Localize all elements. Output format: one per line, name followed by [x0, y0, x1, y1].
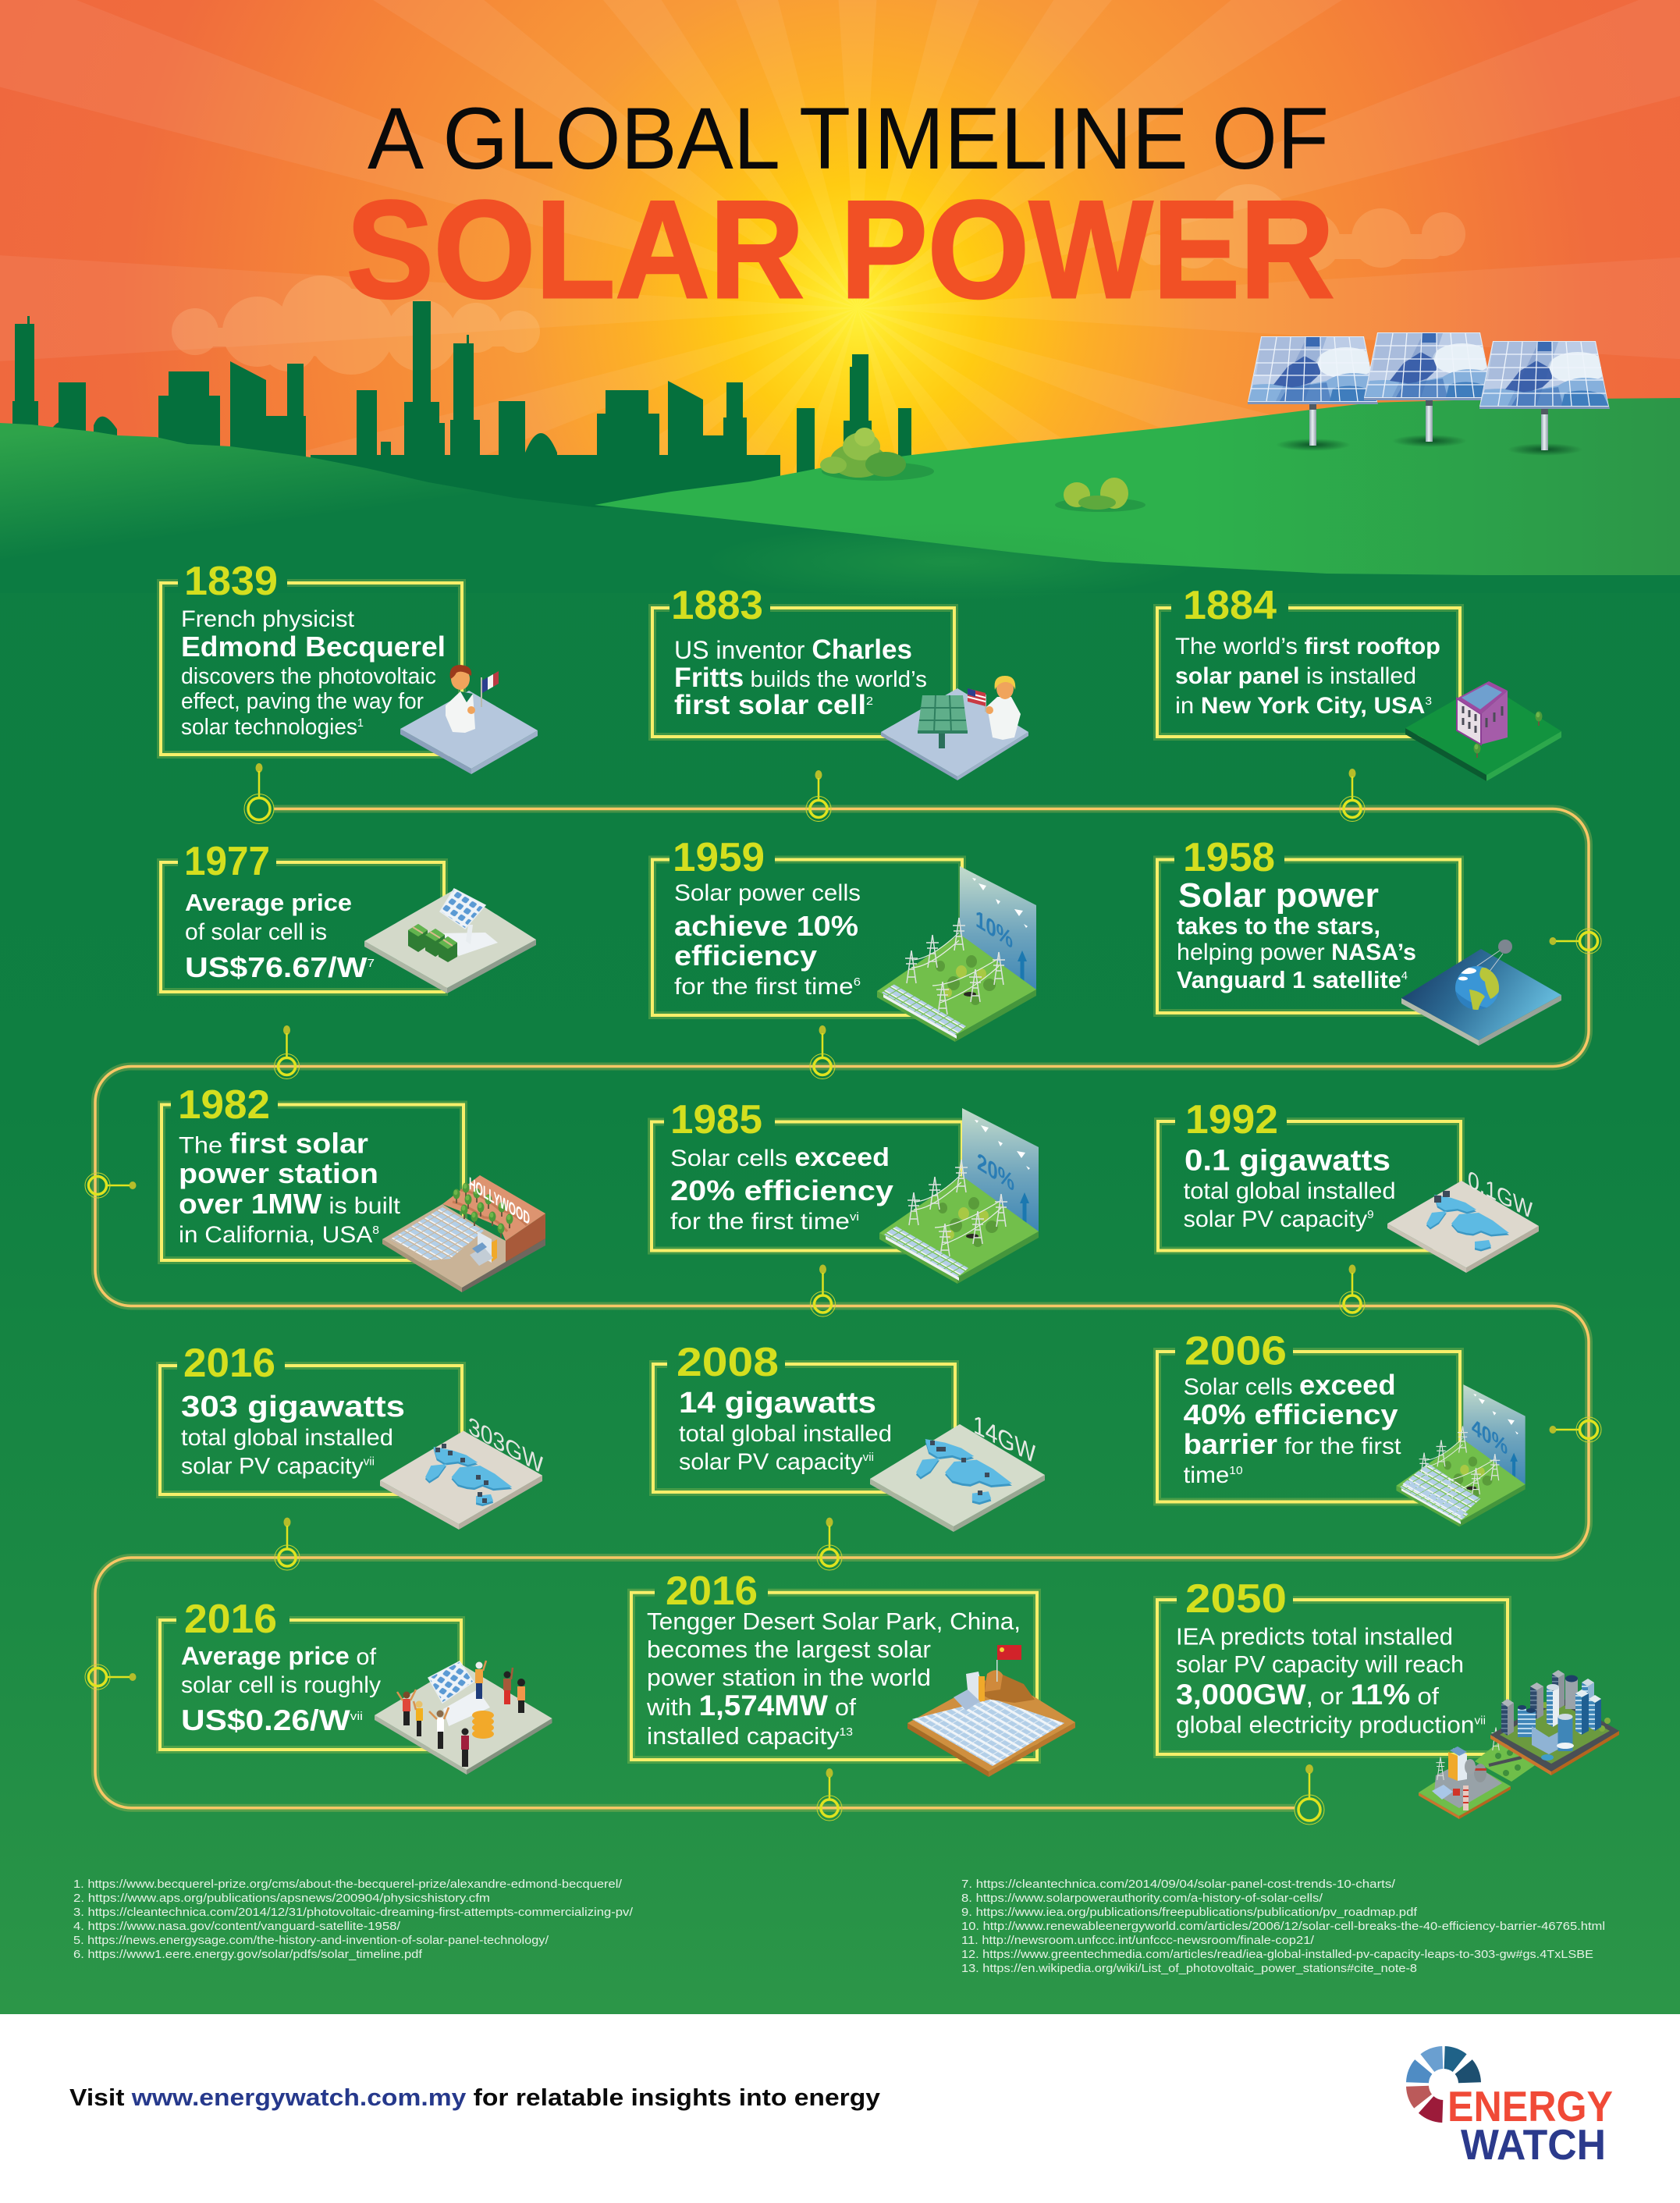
solar panel C: [1479, 341, 1610, 456]
description: first solar cell: [674, 690, 852, 720]
node 1883: [806, 770, 831, 821]
description: Fritts builds the world’s: [674, 663, 927, 693]
description: Solar cells exceed: [1184, 1369, 1396, 1401]
logo wheel: [1406, 2046, 1481, 2123]
footnotes right column: 10. http://www.renewableenergyworld.com/articles/2006/12/solar-cell-breaks-the-40-efficiency-barrier-46765.html: [961, 1920, 1605, 1933]
node 1985: [810, 1264, 835, 1316]
panel: 1982 California: [162, 1082, 545, 1292]
icon: Tengger desert solar park with Chinese flag: [907, 1645, 1075, 1777]
year: 2016: [183, 1341, 275, 1386]
logo word ENERGY: ENERGY: [1447, 2082, 1613, 2130]
description: The world’s first rooftop: [1175, 634, 1440, 659]
tile lower left: [1419, 1746, 1511, 1819]
footnotes right column: 7. https://cleantechnica.com/2014/09/04/solar-panel-cost-trends-10-charts/: [961, 1878, 1396, 1891]
description: [1177, 876, 1416, 993]
description: solar panel is installed: [1175, 663, 1416, 689]
description: in New York City, USA: [1175, 693, 1417, 719]
description: Solar cells exceed: [670, 1142, 890, 1171]
description: [185, 889, 375, 983]
description: Solar power cells: [674, 880, 861, 906]
frame: [1158, 1121, 1461, 1250]
description: vii: [364, 1455, 375, 1469]
icon: earth and satellite in space tile: [1401, 940, 1561, 1046]
cloud right: [1139, 184, 1465, 272]
description: [674, 634, 927, 720]
description: 2: [866, 695, 873, 708]
solar panel B: [1364, 332, 1494, 447]
description: vi: [850, 1210, 859, 1224]
description: vii: [350, 1710, 363, 1723]
footnotes left column: [73, 1878, 634, 1961]
description: vii: [863, 1451, 874, 1464]
description: in California, USA: [179, 1222, 364, 1248]
node 1958: [1550, 929, 1601, 954]
solar panel array on hill: [1248, 332, 1610, 456]
description: achieve 10%: [674, 910, 858, 942]
frame: [160, 1620, 461, 1750]
frame: [631, 1593, 1037, 1760]
description: over 1MW is built: [179, 1188, 401, 1220]
icon: world map tile 303GW: [380, 1412, 543, 1530]
year: 1884: [1183, 583, 1277, 628]
description: solar PV capacity will reach: [1176, 1650, 1464, 1678]
description: [181, 1391, 405, 1480]
icon: money stacks and solar panel on platform: [364, 889, 536, 993]
footnotes right column: 8. https://www.solarpowerauthority.com/a-history-of-solar-cells/: [961, 1892, 1323, 1905]
panel: 1992 capacity: [1158, 1097, 1539, 1273]
description: 9: [1367, 1208, 1374, 1221]
person red: [397, 1690, 416, 1725]
panel: 2016 price: [160, 1597, 552, 1775]
description: 0.1 gigawatts: [1185, 1145, 1391, 1178]
footnotes left column: 3. https://cleantechnica.com/2014/12/31/photovoltaic-dreaming-first-attempts-commercializing-pv/: [73, 1906, 634, 1919]
description: solar PV capacity: [181, 1454, 362, 1480]
year: 1992: [1185, 1097, 1278, 1142]
description: total global installed: [181, 1425, 393, 1451]
description: solar PV capacity: [679, 1449, 860, 1475]
description: total global installed: [1184, 1178, 1396, 1204]
tile green middle: [1475, 1719, 1537, 1782]
description: Average price of: [181, 1642, 377, 1670]
node 1959: [810, 1025, 835, 1078]
description: 40% efficiency: [1184, 1398, 1398, 1430]
description: with 1,574MW of: [646, 1690, 856, 1722]
description: US inventor Charles: [674, 634, 912, 665]
description: [179, 1127, 401, 1248]
icon: 40 percent efficiency scene: 40%: [1472, 1413, 1508, 1460]
description: 3: [1425, 695, 1432, 708]
person orange with hat: [475, 1661, 486, 1699]
node 1839: [244, 763, 274, 824]
panel: 2008 14 gigawatts: [653, 1340, 1045, 1532]
description: [181, 1642, 381, 1736]
description: Tengger Desert Solar Park, China,: [647, 1608, 1021, 1635]
frame: [653, 1364, 955, 1492]
footnotes right column: 9. https://www.iea.org/publications/freepublications/publication/pv_roadmap.pdf: [961, 1906, 1418, 1919]
node 2050: [1295, 1764, 1324, 1825]
cloud left: [172, 275, 540, 375]
description: time: [1184, 1462, 1227, 1488]
hill shading: [702, 523, 1202, 601]
person patterned: [503, 1668, 513, 1704]
description: US$76.67/W: [185, 951, 344, 983]
icon: scientist with French flag on platform: [400, 665, 538, 774]
node 2016 capacity: [275, 1518, 300, 1570]
panel: 1977 price: [161, 839, 536, 993]
frame: [1157, 860, 1460, 1013]
frame: [1157, 1600, 1508, 1754]
timeline nodes: [85, 763, 1601, 1825]
footnotes left column: 4. https://www.nasa.gov/content/vanguard-satellite-1958/: [73, 1920, 401, 1933]
year: 1959: [673, 835, 765, 880]
icon: 20 percent efficiency scene: [879, 1108, 1039, 1284]
frame: [652, 608, 954, 737]
panel: 2016 303 gigawatts: [160, 1341, 543, 1530]
panel: 1839 Becquerel: [161, 559, 538, 774]
description: Solar power: [1178, 876, 1379, 915]
title line 1: A GLOBAL TIMELINE OF: [368, 90, 1329, 187]
icon: 40 percent efficiency scene: [1396, 1384, 1525, 1526]
description: takes to the stars,: [1177, 912, 1380, 940]
footnotes right column: [961, 1878, 1605, 1975]
node 2006: [1550, 1417, 1601, 1442]
description: The first solar: [179, 1127, 368, 1160]
right hill: [595, 398, 1680, 575]
panel: 1884 rooftop: [1157, 583, 1561, 781]
bush small: [1055, 478, 1145, 512]
panel: 1958 Vanguard: [1157, 835, 1561, 1046]
capacity label: 0.1GW: [1468, 1165, 1533, 1224]
description: efficiency: [674, 940, 817, 972]
description: 20% efficiency: [670, 1174, 893, 1206]
description: power station in the world: [647, 1664, 931, 1691]
frame: [1157, 608, 1460, 737]
node 1977: [275, 1025, 300, 1078]
icon: future solar city tiles: [1419, 1670, 1619, 1819]
description: IEA predicts total installed: [1176, 1623, 1453, 1650]
solar panel A: [1248, 336, 1378, 451]
description: 6: [854, 975, 861, 989]
node 1982: [85, 1173, 136, 1198]
description: 4: [1401, 969, 1408, 982]
logo: Energy Watch: [1406, 2046, 1613, 2169]
person white: [429, 1707, 449, 1749]
icon: 20 percent efficiency scene: 20%: [977, 1147, 1014, 1196]
description: [181, 606, 446, 740]
icon: 10 percent efficiency scene: [877, 866, 1036, 1042]
icon: building with rooftop panel on grass: [1405, 681, 1561, 781]
footnotes right column: 11. http://newsroom.unfccc.int/unfccc-newsroom/finale-cop21/: [961, 1934, 1315, 1947]
footnotes left column: 5. https://news.energysage.com/the-history-and-invention-of-solar-panel-technology/: [73, 1934, 549, 1947]
title: [346, 90, 1334, 327]
HOLLYWOOD sign: HOLLYWOOD: [469, 1174, 530, 1229]
description: power station: [179, 1157, 378, 1189]
description: 14 gigawatts: [679, 1387, 876, 1420]
timeline connector line: [95, 808, 1589, 1808]
year: 1958: [1183, 835, 1275, 880]
tile city: [1490, 1670, 1619, 1775]
description: discovers the photovoltaic: [181, 664, 436, 689]
year: 2006: [1185, 1328, 1287, 1373]
description: [674, 880, 861, 1000]
description: effect, paving the way for: [181, 689, 424, 714]
city skyline silhouette: [12, 301, 911, 515]
description: solar technologies: [181, 715, 364, 740]
footnotes right column: 13. https://en.wikipedia.org/wiki/List_of_photovoltaic_power_stations#cite_note-8: [961, 1962, 1417, 1975]
icon: world map tile 14GW: [870, 1409, 1045, 1532]
year: 2016: [184, 1597, 277, 1642]
frame: [161, 583, 462, 755]
description: 10: [1229, 1464, 1243, 1477]
title line 2: SOLAR POWER: [346, 172, 1334, 327]
year: 1883: [671, 583, 763, 628]
frame: [652, 860, 962, 1015]
footnotes right column: 12. https://www.greentechmedia.com/articles/read/iea-global-installed-pv-capacity-leaps-to-303-gw#gs.4TxLSBE: [961, 1948, 1593, 1961]
description: for the first time: [670, 1209, 832, 1235]
capacity label: 303GW: [468, 1412, 543, 1480]
description: 8: [372, 1224, 379, 1237]
footnotes left column: 2. https://www.aps.org/publications/apsnews/200904/physicshistory.cfm: [73, 1892, 490, 1905]
description: French physicist: [181, 606, 355, 632]
description: for the first time: [674, 974, 836, 1000]
year: 1982: [178, 1082, 270, 1128]
sky gradient: [0, 0, 1680, 562]
footer call to action: Visit www.energywatch.com.my for relatable insights into energy: [69, 2084, 881, 2111]
year: 1985: [670, 1097, 762, 1142]
frame: [162, 1105, 464, 1260]
header illustration: sky with rays, skyline and hills: [0, 0, 1680, 581]
icon: scientist with US flag and solar cell on platform: [881, 676, 1028, 780]
panel: 2016 Tengger: [631, 1569, 1075, 1777]
panel: 1985 20 percent: [652, 1097, 1039, 1284]
frame: [652, 1122, 962, 1250]
node 1992: [1340, 1264, 1365, 1316]
description: [1176, 1623, 1486, 1739]
year: 1977: [184, 839, 270, 884]
node 1884: [1340, 769, 1365, 821]
frame: [1157, 1352, 1460, 1501]
description: US$0.26/W: [181, 1704, 329, 1736]
icon: people celebrating around solar panel and coins: [375, 1661, 552, 1775]
description: installed capacity: [647, 1722, 831, 1750]
description: 13: [840, 1725, 853, 1739]
left hill: [0, 423, 1680, 593]
description: global electricity production: [1176, 1711, 1468, 1739]
description: Average price: [185, 889, 352, 916]
footer band: [0, 2014, 1680, 2203]
capacity label: 14GW: [973, 1409, 1035, 1469]
icon: solar power station below Hollywood hill: [382, 1174, 545, 1292]
person yellow: [414, 1701, 423, 1736]
description: 7: [367, 957, 375, 970]
year: 2008: [677, 1340, 779, 1385]
node 2008: [817, 1518, 842, 1570]
person orange: [517, 1679, 525, 1713]
description: 303 gigawatts: [181, 1391, 405, 1423]
description: becomes the largest solar: [647, 1636, 931, 1663]
icon: world map tile 0.1GW: [1387, 1165, 1539, 1273]
panel: 1883 Charles Fritts: [652, 583, 1028, 780]
year: 1839: [184, 559, 278, 604]
frame: [161, 862, 444, 992]
description: [1184, 1145, 1396, 1232]
description: [670, 1142, 893, 1235]
panel: 1959 10 percent: [652, 835, 1036, 1042]
description: of solar cell is: [185, 919, 327, 945]
description: helping power NASA’s: [1177, 940, 1416, 965]
description: [679, 1387, 892, 1475]
node 2016 Tengger: [817, 1768, 842, 1821]
logo word WATCH: WATCH: [1461, 2120, 1606, 2169]
description: 1: [357, 716, 364, 730]
description: Vanguard 1 satellite: [1177, 966, 1404, 993]
frame: [160, 1366, 462, 1494]
description: 3,000GW , or 11% of: [1176, 1679, 1439, 1711]
footnotes left column: 6. https://www1.eere.energy.gov/solar/pdfs/solar_timeline.pdf: [73, 1948, 423, 1961]
description: vii: [1475, 1714, 1486, 1728]
panel: 2050 forecast: [1157, 1576, 1619, 1819]
description: solar cell is roughly: [181, 1672, 381, 1698]
icon: 10 percent efficiency scene: 10%: [975, 904, 1013, 954]
description: Edmond Becquerel: [181, 631, 446, 663]
node 2016 price: [85, 1665, 136, 1690]
person maroon: [461, 1728, 469, 1767]
footnotes left column: 1. https://www.becquerel-prize.org/cms/about-the-becquerel-prize/alexandre-edmond-becquerel/: [73, 1878, 623, 1891]
panel: 2006 40 percent: [1157, 1328, 1525, 1526]
description: total global installed: [679, 1421, 892, 1447]
description: solar PV capacity: [1184, 1206, 1364, 1232]
year: 2050: [1185, 1576, 1287, 1622]
description: [1175, 634, 1440, 719]
year: 2016: [666, 1569, 758, 1614]
bush large: [820, 428, 934, 481]
description: [1184, 1369, 1401, 1488]
description: [646, 1608, 1021, 1750]
description: barrier for the first: [1184, 1428, 1401, 1460]
